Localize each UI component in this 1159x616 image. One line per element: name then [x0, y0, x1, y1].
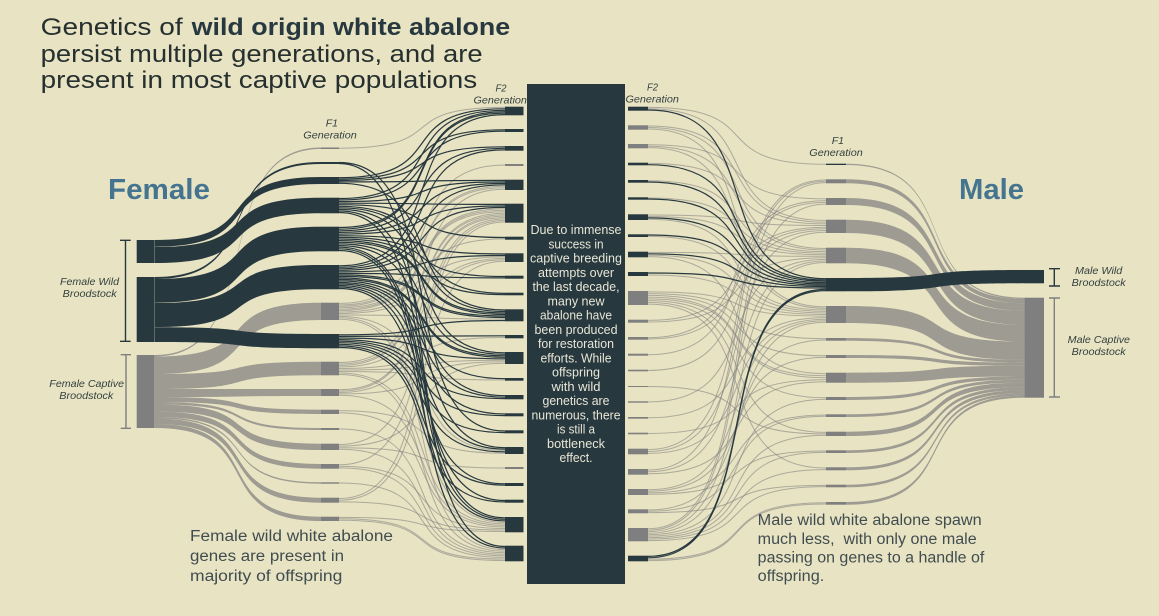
label: female wild broodstock: Broodstock: [63, 288, 117, 300]
label: female wild broodstock: [60, 276, 120, 300]
bracket: male wild: [1049, 269, 1060, 286]
label: female F1 generation: Generation: [303, 130, 357, 142]
heading: Female: Female: [108, 174, 210, 206]
flows: female F1 to F2: [339, 107, 505, 561]
callout: male: much less, with only one male: [758, 531, 977, 548]
center panel text: numerous, there: [532, 408, 621, 422]
female F1 nodes: [321, 148, 339, 521]
title: Genetics of: [41, 14, 183, 41]
center panel text: efforts. While: [540, 351, 612, 365]
center panel text: abalone have: [540, 308, 612, 322]
label: male F2 generation: [626, 82, 679, 106]
male broodstock nodes: [1025, 270, 1044, 398]
wild-origin links: [648, 110, 826, 558]
center panel text: been produced: [534, 323, 618, 337]
heading: Male: Male: [959, 174, 1024, 206]
label: female wild broodstock: Female Wild: [60, 276, 120, 288]
center panel text: for restoration: [538, 337, 614, 351]
male F2 nodes: [628, 107, 648, 561]
callout: female: genes are present in: [190, 548, 344, 565]
label: female F2 generation: Generation: [474, 95, 527, 107]
label: male wild broodstock: [1072, 265, 1126, 289]
flows: male F1 to captive broodstock: [846, 164, 1025, 505]
callout: female: [190, 528, 393, 585]
title: [41, 14, 510, 94]
label: female F1 generation: [303, 118, 357, 142]
label: male F1 generation: Generation: [809, 147, 863, 159]
callout: male: Male wild white abalone spawn: [758, 512, 982, 529]
label: male captive broodstock: Male Captive: [1068, 334, 1130, 346]
bracket: male captive: [1049, 298, 1060, 397]
label: female captive broodstock: Female Captive: [49, 378, 124, 390]
callout: female: Female wild white abalone: [190, 528, 393, 545]
label: female captive broodstock: Broodstock: [59, 390, 114, 402]
center panel text: effect.: [560, 451, 592, 465]
callout: male: passing on genes to a handle of: [758, 550, 985, 566]
center panel text: [530, 223, 622, 465]
label: female F2 generation: F2: [496, 83, 507, 95]
center panel text: offspring: [552, 366, 600, 380]
label: male F1 generation: F1: [832, 135, 844, 147]
callout: male: offspring.: [758, 568, 824, 585]
captive-origin links: [648, 107, 826, 561]
center panel text: with wild: [550, 380, 601, 394]
title: wild origin white abalone: [191, 14, 510, 41]
label: male F2 generation: Generation: [626, 94, 679, 106]
label: male wild broodstock: Male Wild: [1075, 265, 1123, 277]
title: present in most captive populations: [41, 67, 477, 94]
center panel text: is still a: [557, 422, 595, 436]
flows: male F2 to F1: [648, 107, 826, 561]
wild-origin links: [339, 109, 505, 548]
center panel text: the last decade,: [532, 280, 620, 294]
center panel text: many new: [548, 294, 605, 308]
center panel text: Due to immense: [530, 223, 622, 237]
flows: female captive broodstock to F1: [155, 148, 321, 521]
label: male F1 generation: [809, 135, 863, 159]
label: male captive broodstock: [1068, 334, 1130, 358]
callout: female: majority of offspring: [190, 568, 342, 585]
label: female F2 generation: [474, 83, 527, 107]
flows: female wild broodstock to F1: [155, 162, 321, 348]
bracket: female captive: [121, 355, 131, 428]
female F2 nodes: [505, 107, 524, 561]
label: male captive broodstock: Broodstock: [1072, 346, 1126, 358]
male F1 nodes: [826, 164, 846, 505]
female broodstock nodes: [137, 240, 155, 428]
label: male F2 generation: F2: [647, 82, 658, 94]
callout: male: [758, 512, 985, 585]
title: persist multiple generations, and are: [41, 41, 483, 68]
flow: male F1 to wild broodstock: [846, 270, 1025, 291]
bracket: female wild: [120, 240, 131, 341]
center panel text: bottleneck: [547, 437, 606, 451]
label: female captive broodstock: [49, 378, 124, 402]
label: female F1 generation: F1: [326, 118, 338, 130]
center panel text: attempts over: [538, 266, 614, 280]
captive-origin links: [339, 107, 505, 561]
center panel text: captive breeding: [530, 252, 622, 266]
center panel: [527, 84, 625, 584]
center panel text: success in: [548, 237, 604, 251]
center panel text: genetics are: [542, 394, 610, 408]
label: male wild broodstock: Broodstock: [1072, 277, 1126, 289]
